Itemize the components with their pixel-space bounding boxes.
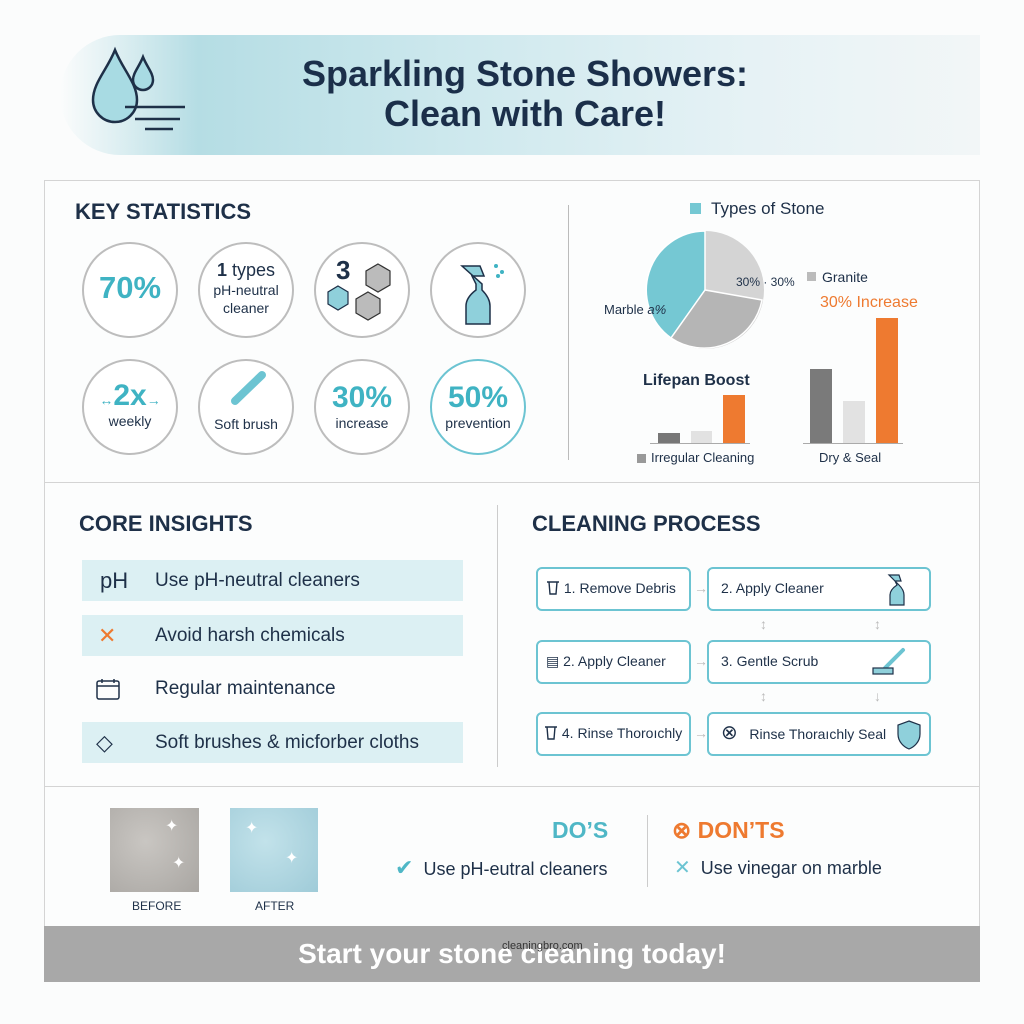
stat: 30% increase: 30%	[332, 381, 392, 414]
process flow: ↕	[874, 616, 881, 632]
process flow: →	[694, 653, 708, 669]
process flow: ↓	[874, 688, 881, 704]
chart: lifespan boost bars: Dry & Seal	[819, 450, 881, 465]
step: gentle scrub: 3. Gentle Scrub	[721, 653, 818, 669]
step: rinse thoroughly	[536, 712, 691, 756]
insight 1: Use pH-neutral cleaners	[155, 570, 360, 591]
insight 1: pH	[100, 568, 128, 593]
stat: 1 types: cleaner	[223, 300, 269, 316]
after	[230, 808, 318, 892]
chart: types of stone pie: Granite	[822, 269, 868, 285]
stat: 3 hexagons	[314, 242, 410, 338]
heading: key statistics: KEY STATISTICS	[75, 199, 251, 224]
do's: DO’S	[552, 817, 608, 843]
step: gentle scrub	[707, 640, 931, 684]
header banner	[60, 35, 980, 155]
insight 2: Avoid harsh chemicals	[155, 625, 345, 646]
after: ✦	[285, 850, 298, 867]
chart: types of stone pie: 30% · 30%	[736, 275, 795, 289]
footer call to action: cleaningbro.com	[502, 940, 583, 952]
stat: 70%	[82, 242, 178, 338]
heading: core insights: CORE INSIGHTS	[79, 511, 253, 536]
stat: soft brush: Soft brush	[214, 416, 278, 432]
stat: spray	[430, 242, 526, 338]
before	[110, 808, 199, 892]
icon: water drops	[92, 46, 185, 130]
heading: cleaning process: CLEANING PROCESS	[532, 511, 761, 536]
footer call to action	[44, 926, 980, 982]
stat: 70%: 70%	[99, 270, 161, 305]
main panel border	[44, 180, 980, 982]
before/after images	[110, 808, 318, 913]
title: Clean with Care!	[384, 93, 666, 134]
after: ✦	[245, 820, 258, 837]
step: remove debris	[536, 567, 691, 611]
before: ✦	[165, 818, 178, 835]
stat: 30% increase	[314, 359, 410, 455]
stat circles	[82, 242, 526, 455]
insight 2	[82, 615, 463, 656]
stat: 50% prevention: prevention	[445, 415, 511, 431]
step: rinse seal	[707, 712, 931, 756]
insight 3: Regular maintenance	[155, 678, 336, 699]
before: ✦	[172, 855, 185, 872]
stat: 50% prevention: 50%	[448, 381, 508, 414]
insight 1	[82, 560, 463, 601]
stat: 1 types	[198, 242, 294, 338]
step: remove debris: 1. Remove Debris	[564, 580, 676, 596]
chart: lifespan boost bars: Irregular Cleaning	[651, 450, 754, 465]
stat: soft brush	[198, 359, 294, 455]
insights list	[82, 560, 463, 763]
do's: ✔ Use pH-eutral cleaners	[395, 855, 608, 880]
process flow: →	[694, 580, 708, 596]
chart: types of stone pie: 30% Increase	[820, 294, 918, 311]
stat: 2x weekly: weekly	[109, 413, 151, 429]
do's	[395, 817, 608, 880]
step: rinse thoroughly: 4. Rinse Thoroıchly	[562, 725, 682, 741]
process flow: →	[694, 725, 708, 741]
chart: types of stone pie: Marble a%	[604, 302, 666, 317]
don'ts	[672, 817, 882, 879]
step: rinse seal: ⊗ Rinse Thoraıchly Seal	[721, 722, 886, 744]
chart: types of stone pie	[604, 199, 918, 349]
stat: 30% increase: increase	[336, 415, 388, 431]
process flow: ↕	[760, 616, 767, 632]
don'ts: ✕ Use vinegar on marble	[674, 857, 882, 879]
before/after images: BEFORE	[132, 899, 181, 913]
stat: 2x weekly	[82, 359, 178, 455]
insight 2: ✕	[98, 623, 116, 648]
process flow	[536, 567, 931, 756]
chart: lifespan boost bars	[637, 318, 903, 465]
insight 4: Soft brushes & micforber cloths	[155, 732, 419, 753]
title	[302, 53, 748, 134]
stat: 1 types: pH-neutral	[213, 282, 279, 298]
don'ts: ⊗ DON’TS	[672, 817, 785, 843]
step: apply cleaner: 2. Apply Cleaner	[721, 580, 824, 596]
before/after images: AFTER	[255, 899, 294, 913]
chart: types of stone pie: Types of Stone	[711, 199, 824, 218]
process flow: ↕	[760, 688, 767, 704]
stat: 50% prevention	[430, 359, 526, 455]
footer call to action: Start your stone cleaning today!	[298, 938, 726, 969]
chart: lifespan boost bars: Lifepan Boost	[643, 372, 750, 389]
stat: 3 hexagons: 3	[336, 255, 350, 285]
stat: 2x weekly: ↔2x→	[99, 379, 161, 412]
step: apply cleaner	[707, 567, 931, 611]
title: Sparkling Stone Showers:	[302, 53, 748, 94]
insight 4: ◇	[96, 730, 113, 755]
step: apply cleaner 2: ▤ 2. Apply Cleaner	[546, 653, 666, 669]
step: apply cleaner 2	[536, 640, 691, 684]
stat: 1 types: 1 types	[217, 260, 275, 280]
insight 4	[82, 722, 463, 763]
